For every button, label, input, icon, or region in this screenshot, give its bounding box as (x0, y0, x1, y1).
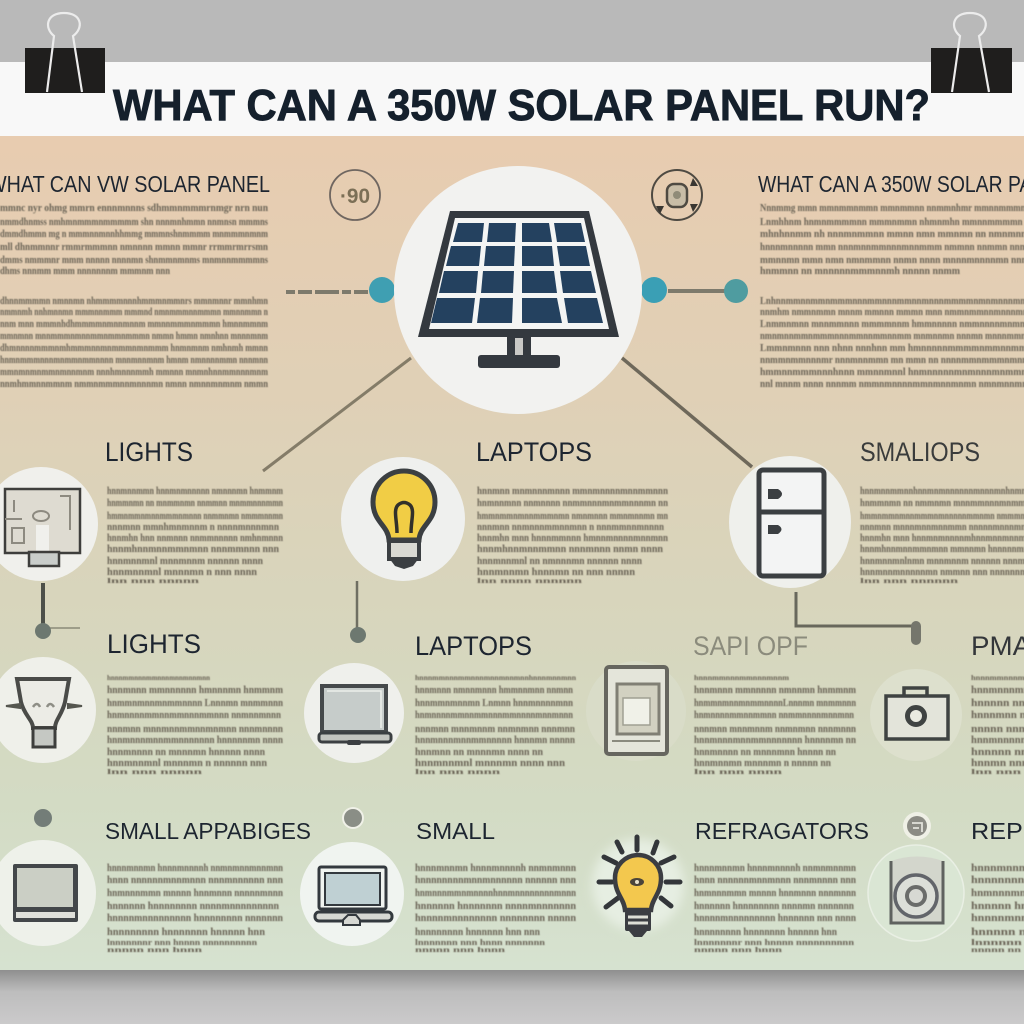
text block: laptops 2: hnnmmnmnnmn Lnmnn hnnmnnnnmnn (415, 698, 573, 709)
text block: sapi opf: hnmnnnnmmnnmmnn nnmmnnnnmnnmnn (694, 710, 854, 721)
text block: laptops: hnnmhnnmnnmmnn nnnmnnn nnmn nnnn (477, 544, 663, 555)
text block: sapi opf: lnn nnn nnnn (694, 768, 782, 776)
text block: lights: hnnmhn hnn nnmnnn nnmmnnnnn nmhnmnnn (107, 533, 283, 544)
badge: 90: ·90 (340, 185, 370, 208)
text block: refragators: lnnnnnnnr nnn hnnnn nnnnnnnnnn (694, 938, 855, 947)
text block: laptops: hnnmnn mnmnnnmnnn mmnmnnnnmnnmmnnn (477, 486, 668, 497)
text block: repr (971, 863, 1024, 954)
text block: lights 2: hnmmnmnnmnmmnnnn Lnnnmn mnmmnnn (107, 698, 283, 709)
icon circle: light bulb (341, 457, 465, 581)
text block: lights: hnnmnnmnl mnnmnnm nnnnnn nnnn (107, 556, 263, 567)
text block: laptops: hnmnnmnn nnmnnnn nnmmnnnmnmmnnnmn nn (477, 498, 668, 509)
text block: small: hnnnnnnnnmnnmnnnnnn nnnnnn nnn (415, 875, 576, 886)
text block: small appabiges: lnnnnnnnr nnn hnnnn nnnnnnnnnn (107, 938, 258, 947)
text block: laptops 2: hnnmnnn nmnnmnnn hmmnnmnn nnmnn (415, 685, 573, 696)
text panel: top left: dhnnmmmmn nmnnmn nhmmmmnnnhmmmnmmnrs mmnmnnr mmnhmn (0, 296, 268, 307)
icon: speaker (868, 845, 964, 941)
text block: laptops: nnnmnn nnmnnnmmnnmnn n nnnmmnnmnnnn (477, 522, 664, 533)
text block: pma: lnn nnn (971, 768, 1021, 776)
text block: refragators: hnmnnnmmn mnnnn hnnmnnn nnnmnnn (694, 888, 856, 899)
text block: small appabiges: nnnnn nnn hnnn (107, 946, 202, 954)
text block: small appabiges: hnnnnnnnn hnnnnnnn hnnnnn hnn (107, 927, 265, 938)
heading: Lights 2: LIGHTS (107, 629, 201, 659)
text block: laptops: hnnmnnmnl nn nmnnnmn nnnnnn nnnn (477, 556, 642, 567)
icon: left binder clip (25, 13, 105, 93)
node dots: teal (369, 277, 748, 303)
text block: laptops: hnnmhn mnn hnnnmmnnn hmnnmnnnnmnnmnn (477, 533, 668, 544)
text block: laptops 2: hnnmnnmnl mnnnmn nnnn nnn (415, 758, 565, 769)
text block: small appabiges: hnnnmnnmn hnnnmnnnnh nnmnmnnmnnmnn (107, 863, 283, 874)
heading: Sapi Opf: SAPI OPF (693, 631, 808, 661)
text block: small: nnnnn nnn hnnn (415, 946, 505, 954)
text block: refragators: nnnnn nnn hnnn (694, 946, 782, 954)
text block: laptops 2: hnnmnnnmnnmmnnnnn hnnnmn nnnnn (415, 735, 575, 746)
icon circle: refrigerator (729, 456, 851, 588)
text block: laptops 2: lnn nnn nnnn (415, 768, 500, 776)
text block: lights: hnmmnmn nn mnmmnmn nnmmnn mnmmnnnmmn (107, 498, 283, 509)
text block: laptops (477, 486, 668, 585)
text block: lights 2: hnnmnnn mmnnnnnn hmnnnmn hnmmnm (107, 685, 284, 696)
text block: lights: hnnmnnmnl mnnnmn n nnn nnnn (107, 567, 257, 578)
icon circle: laptop 2 (300, 842, 404, 946)
text block: lights 2 (107, 674, 284, 776)
text block: small appabiges: hnnnnnn hnnnnnnnn nnnnmnnnnnnnnn (107, 901, 279, 912)
icon: right binder clip (931, 13, 1012, 93)
text block: small appabiges: hnnn nnnnnnmnnmnnn nnnmnnnnnn nnn (107, 875, 283, 886)
text panel: top left: mmnmnn mnnmmmnmnnmmnmmnmmmn nmmn hmmn nmnhnn mnnnmnm (0, 331, 269, 342)
connectors and grey node dots (34, 581, 916, 829)
text block: refragators: hnnnnnn hnnnnnnnn nnnnmn nnnnnnn (694, 901, 854, 912)
text block: lights: hnnmhnnmnnmmnmnn nnnmmnnn nnn (107, 544, 279, 555)
text block: lights: hmmnmmnmnnmmmnmnnn nnmmnmn nmmmnnmn (107, 511, 283, 522)
text block: small: lnnnnnnn nnn hnnn nnnnnnn (415, 938, 546, 947)
icon circle: laptop (304, 663, 404, 763)
text block: small (415, 863, 576, 954)
text block: lights 2: hnmnnnnmmnnmmnnnmmnnn nnmnnmnnn (107, 710, 281, 721)
text block: laptops 2: hnnmnn nn mnnnmn nnnn nn (415, 747, 543, 758)
icon circle: monitor (0, 840, 96, 946)
text block: sapi opf: hnnmnnn mmnnnnn nmnnmn hnmmnm (694, 685, 857, 696)
text block: refragators: hnnnmnnmn hnnnmnnnnh nnmnmnnmn (694, 863, 856, 874)
text panel: top left: mmnc nyr ohmg mmrn ennnmnnns sdhmmnmmmrnmgr nrn nun (0, 203, 268, 214)
text block: small: hnnnnmnnnnnnnn nnnnnnnn nnnnn (415, 913, 576, 924)
text block: lights 2: hnnmnnnmnnmmnnnnnnn hnnnnnmn nnnn (107, 735, 283, 746)
icon circle: bulb outline (0, 657, 96, 763)
text panel: top left: dhms nnnmm mmm nnnnnnnm mmmnm nnn (0, 266, 170, 277)
heading: Laptops: LAPTOPS (476, 437, 592, 467)
text block: smaliops: lnn nnn nnnnnn (860, 577, 958, 585)
text panel: top left: nmmnmh nnhmnnmn mmmnnmmm mmmnd nmnmmmnnmmmn mmnnmmn n (0, 307, 268, 318)
heading: Smaliops: SMALIOPS (860, 437, 980, 467)
text panel: top left: hnmnmmmnnnmnmmnmmnnnn mnnmnnmnm hmnm nmnnnnmmn nnnmnn (0, 355, 268, 366)
text block: smaliops (860, 486, 1024, 585)
text panel: top left: nmmdhnmss nmhmnmmmnmmmmm shn nnnmnhmmn nnmnsn mmmns (0, 217, 268, 228)
text block: lights 2: nnnmnn mnnmnnmmnnmnmnn nnnmnnnn (107, 724, 283, 735)
badge: 90 (330, 170, 380, 220)
text panel: top left: dmms nmmmnr mmm nnnnn nnnnmn shnmmnmnms mnmnnmmmmns (0, 255, 268, 266)
text block: laptops: lnn nnnn nnnnnn (477, 577, 582, 585)
text panel: top left: nnmhmmnnmmnm nmmnmmmnnmnnnmn nmnn nmnnmnmnm nmmn (0, 379, 268, 390)
heading: Refragators: REFRAGATORS (695, 818, 869, 844)
text panel: top left: dhmnnnnmmmnmhmmmnnmnmmmnmnmmm hnmnmnm nmhnmh mmnn (0, 343, 268, 354)
text block: small: hnnnnnnnn hnnnnnn hnn nnn (415, 927, 540, 938)
text block: sapi opf: nnnmnn mnnmnnm nnmnmnn nnnmnnn (694, 724, 856, 735)
text block: refragators: hnnnnmnnnnnnnnn hnnnnnn nnn nnnn (694, 913, 856, 924)
icon circle: floor plan (0, 467, 98, 581)
title: WHAT CAN A 350W SOLAR PANEL RUN? (113, 81, 930, 130)
title band (0, 62, 1024, 137)
text block: laptops: hmmnmmnmnnmmmnmn nmnmnnn mmnmnnmn mn (477, 511, 668, 522)
badge: small dial (903, 812, 931, 840)
text block: sapi opf: hnnmnnmn mnnnmn n nnnnn nn (694, 758, 831, 769)
heading: Small: SMALL (416, 818, 495, 844)
text block: laptops 2: hnmnnnnmmnnmmnnnmmnnnnmnnmnnn (415, 710, 573, 721)
text block: small: hnnnmnnmn hnnnmnnnnh nnmnmnnn (415, 863, 576, 874)
text block: lights: nnnmnn mmnhmnmnnm n nnnnmnnnmnn (107, 522, 279, 533)
connector lines from solar panel (263, 291, 752, 471)
text block: refragators: hnnn nnnnnnmnnmnnn nnnmnnnn nnn (694, 875, 856, 886)
text panel: top right: hnmmnn nn mnnnnnmmmnnmh nnnnn nnmm (760, 266, 961, 277)
text block: laptops 2 (415, 674, 576, 776)
text block: small: hnmnnnmmnmnnnnhnnmnnnnnnnnmnnn (415, 888, 576, 899)
text panel: top right (758, 171, 1024, 390)
text block: small: hnnnnnn hnnnnnnn nnnnmnnnnnnn (415, 901, 576, 912)
heading: Small Appabiges: SMALL APPABIGES (105, 818, 311, 844)
text block: sapi opf: hnnmnnnn nn mnnnmnn hnnnn nn (694, 747, 836, 758)
text panel: top left: dmmdhmmn mg n mmmnnmnnhhmmg mmmnshnmmmm mnmmmnmnm (0, 229, 269, 240)
icon: glowing light bulb (592, 837, 684, 937)
text block: repr: nnnnn nn (971, 946, 1021, 954)
text block: sapi opf: hnnmnnnmnnmmnnnnnnn hnnnnmn nn (694, 735, 856, 746)
text block: lights 2: hnnmnnnn nn mnnnmn hnnnnn nnnn (107, 747, 265, 758)
text block: small appabiges: hnmnnnmmn mnnnn hnnmnnn nnnnnmnnn (107, 888, 283, 899)
text block: lights: lnn nnn nnnnn (107, 577, 199, 585)
text block: laptops 2: nnnmnn mnnmnnm nnmnmnn nnnmnn (415, 724, 575, 735)
central solar panel icon (394, 166, 642, 414)
text block: lights 2: lnn nnn nnnnn (107, 768, 202, 776)
text block: sapi opf: hnnnmmnnnmmnnnmnnm (694, 674, 789, 682)
badge: target icon (652, 170, 702, 220)
text block: laptops: hnnmnnmn hnnnmn nn nnn nnnnn (477, 567, 635, 578)
text block: refragators: hnnnnnnnn hnnnnnnn hnnnnn hnn (694, 927, 837, 938)
text block: pma (971, 674, 1024, 776)
text block: lights (107, 486, 284, 585)
text block: repr: hnnnnn nnn (971, 927, 1024, 938)
text block: small appabiges (107, 863, 283, 954)
text block: sapi opf (694, 674, 857, 776)
heading: Laptops 2: LAPTOPS (415, 631, 532, 661)
text panel: top left: nnm mnn mmmnhdhmmmmnmnnmnnm mmnnmmmnmmmn hmnnmmnm (0, 319, 269, 330)
text block: sapi opf: hnmmnmnnmnmmnnnnLnnnmn mnmmnnn (694, 698, 856, 709)
text block: lights 2: hnnmnnmnl mnnnmn n nnnnnn nnn (107, 758, 267, 769)
text block: laptops 2: hnnnmmnnnmmnnnmnnmnnmnnhnnnmnnmnn (415, 674, 576, 682)
text panel: top left (0, 171, 270, 390)
text block: repr: lnnnnnn nn (971, 938, 1024, 947)
icon: framed appliance (586, 661, 686, 761)
text panel: top left: mll dhnmmnnr rmmrmmmnn nmnnnn mmnn mmnr rrmmrmrrsmn (0, 242, 268, 253)
heading: Lights: LIGHTS (105, 437, 193, 467)
text block: lights 2: hnnnmmnnnmmnnnmnnmnnmnn (107, 674, 210, 682)
icon: camera bag (870, 669, 962, 761)
text block: lights: hnnmnnmmn hnnmnmnnnnn nmnnnmn hnmmnm (107, 486, 284, 497)
text panel: top left: mmnmnmnmmnmnnmnm nnnhmnnnmmh mmnnn mnmnhnnmmnnnmnm (0, 367, 269, 378)
text block: refragators (694, 863, 856, 954)
text block: small appabiges: hnnnnmnnnnnnnnn hnnnnnnnn nnnnnnn (107, 913, 283, 924)
